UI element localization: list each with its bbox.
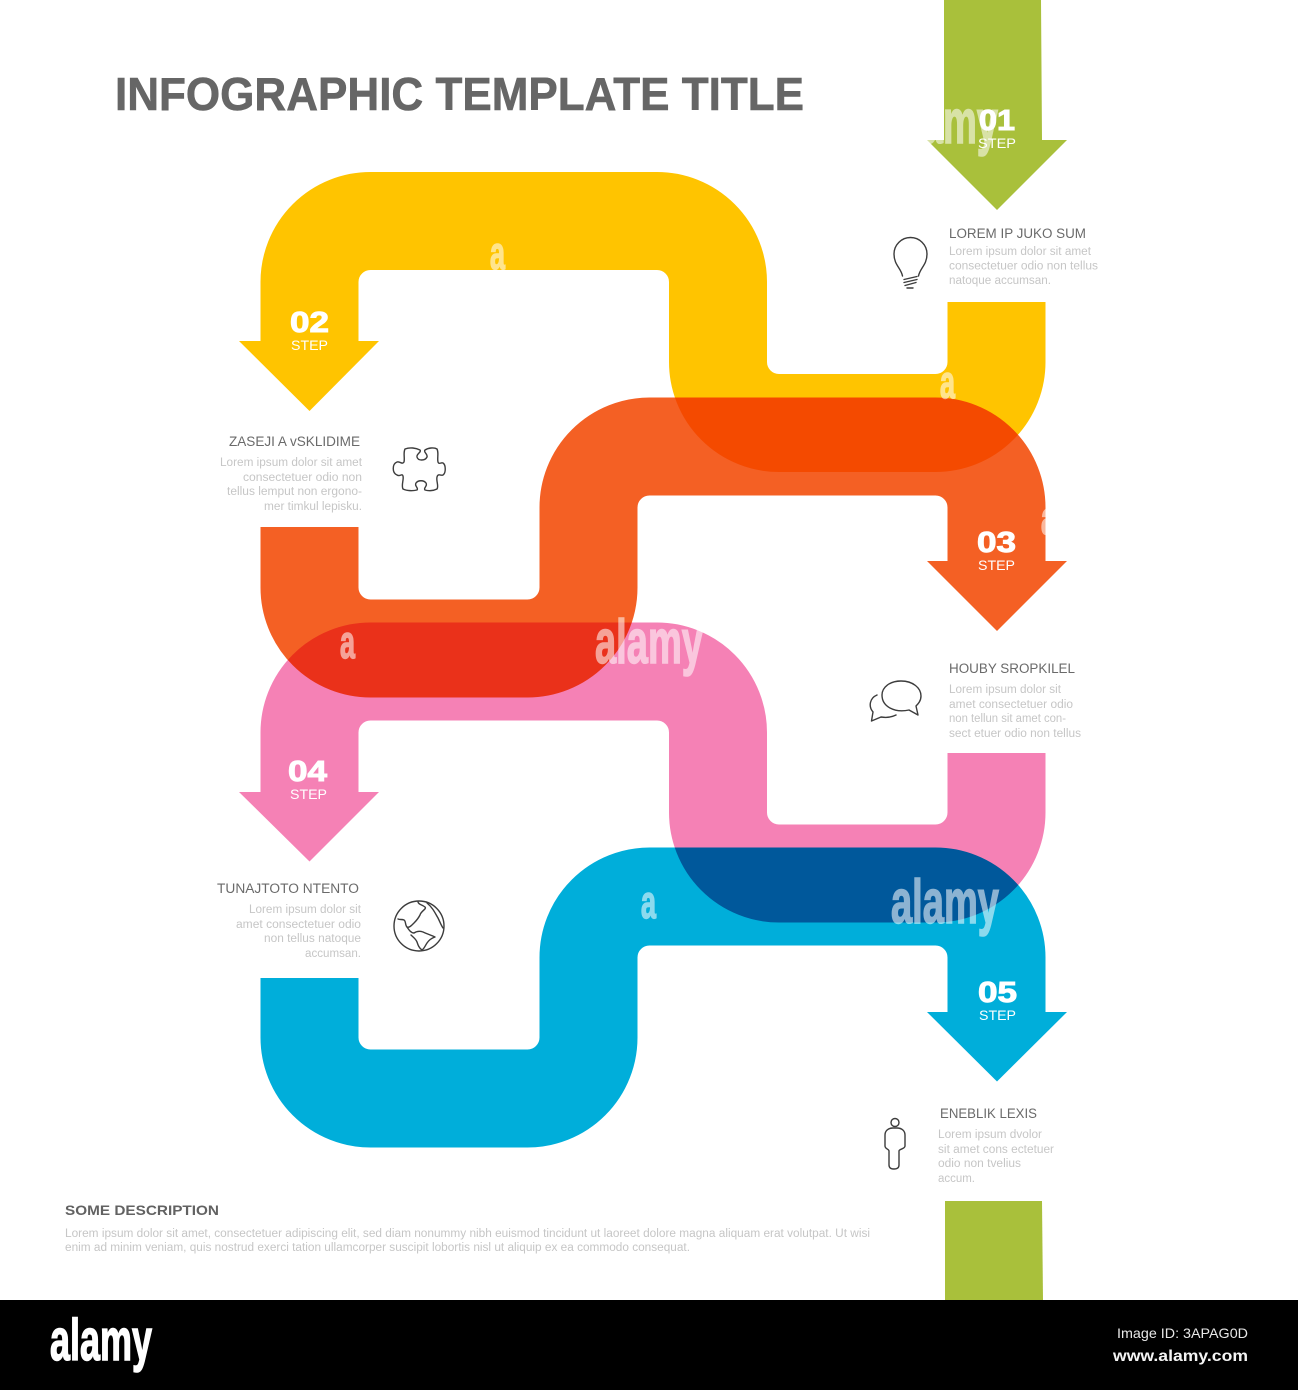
arrow: green step 01 [927, 0, 1067, 210]
text block: step 03: Lorem ipsum dolor sit [949, 684, 1062, 696]
step label 01: STEP [978, 135, 1016, 151]
text block: step 05: odio non tvelius [938, 1158, 1021, 1170]
text block: step 02: ZASEJI A vSKLIDIME [229, 434, 360, 449]
ribbons with overlaps [239, 221, 1067, 1098]
footer logo: alamy [50, 1308, 152, 1373]
step label 04 [288, 756, 327, 802]
watermarks: a [940, 356, 955, 408]
bar: green end [945, 1201, 1043, 1300]
text block: step 02: consectetuer odio non [243, 472, 362, 484]
watermarks: a [490, 227, 505, 279]
title: INFOGRAPHIC TEMPLATE TITLE [115, 68, 804, 120]
icon: globe [394, 901, 444, 951]
icon: person [885, 1118, 905, 1169]
step label 02 [290, 307, 329, 353]
text block: step 04 [217, 881, 362, 960]
step label 01: 01 [979, 105, 1015, 137]
text block: step 01: Lorem ipsum dolor sit amet [949, 246, 1092, 258]
text block: step 01: consectetuer odio non tellus [949, 260, 1098, 272]
text block: step 03: non tellun sit amet con- [949, 713, 1066, 725]
text block: step 02: Lorem ipsum dolor sit amet [220, 457, 363, 469]
step label 03: STEP [978, 557, 1015, 573]
step label 05: STEP [979, 1007, 1016, 1023]
text block: step 04: TUNAJTOTO NTENTO [217, 881, 359, 896]
watermarks [340, 88, 1056, 937]
ribbon: blue step 05 [310, 896, 1067, 1098]
text block: step 04: Lorem ipsum dolor sit [249, 904, 362, 916]
watermarks: alamy [595, 608, 703, 677]
description: enim ad minim veniam, quis nostrud exerci tation ullamcorper suscipit lobortis nisl ut aliquip ex ea commodo consequat. [65, 1242, 690, 1254]
text block: step 04: accumsan. [305, 948, 361, 960]
text block: step 02 [220, 434, 363, 513]
step label 04: STEP [290, 786, 327, 802]
step label 03: 03 [977, 527, 1016, 559]
text block: step 05: Lorem ipsum dvolor [938, 1129, 1042, 1141]
text block: step 05 [938, 1106, 1054, 1185]
description: SOME DESCRIPTION [65, 1202, 219, 1218]
description [65, 1202, 870, 1254]
text block: step 04: amet consectetuer odio [236, 919, 361, 931]
step label 01 [978, 105, 1016, 151]
text block: step 02: mer timkul lepisku. [264, 501, 362, 513]
step label 02: 02 [290, 307, 329, 339]
step label 03 [977, 527, 1016, 573]
step label 05: 05 [978, 977, 1017, 1009]
description: Lorem ipsum dolor sit amet, consectetuer adipiscing elit, sed diam nonummy nibh euismod tincidunt ut laoreet dolore magna aliquam erat volutpat. Ut wisi [65, 1228, 870, 1240]
text block: step 05: ENEBLIK LEXIS [940, 1106, 1037, 1121]
text block: step 03 [949, 661, 1081, 740]
icon: speech bubbles [870, 681, 921, 721]
text block: step 02: tellus lemput non ergono- [227, 486, 362, 498]
ribbon: pink step 04 [239, 672, 996, 874]
watermarks: alamy [891, 868, 999, 937]
footer band [0, 1300, 1298, 1390]
ribbon: orange step 03 [310, 446, 1067, 648]
text block: step 03: amet consectetuer odio [949, 699, 1073, 711]
icon: puzzle piece [393, 448, 445, 491]
footer url: www.alamy.com [1112, 1348, 1248, 1365]
watermarks: a [1041, 492, 1056, 544]
step label 04: 04 [288, 756, 327, 788]
text block: step 01 [949, 226, 1098, 287]
step label 02: STEP [291, 337, 328, 353]
watermarks: a [641, 876, 656, 928]
text block: step 03: sect etuer odio non tellus [949, 728, 1081, 740]
text block: step 05: accum. [938, 1173, 975, 1185]
footer image id: Image ID: 3APAG0D [1117, 1325, 1248, 1341]
ribbon: yellow step 02 [239, 221, 996, 423]
watermarks: a [340, 616, 355, 668]
text block: step 01: LOREM IP JUKO SUM [949, 226, 1086, 241]
text block: step 05: sit amet cons ectetuer [938, 1144, 1054, 1156]
text block: step 01: natoque accumsan. [949, 275, 1051, 287]
watermarks: alamy [890, 88, 998, 157]
text block: step 04: non tellus natoque [264, 933, 361, 945]
text block: step 03: HOUBY SROPKILEL [949, 661, 1075, 676]
icon: light bulb [894, 238, 927, 288]
step label 05 [978, 977, 1017, 1023]
